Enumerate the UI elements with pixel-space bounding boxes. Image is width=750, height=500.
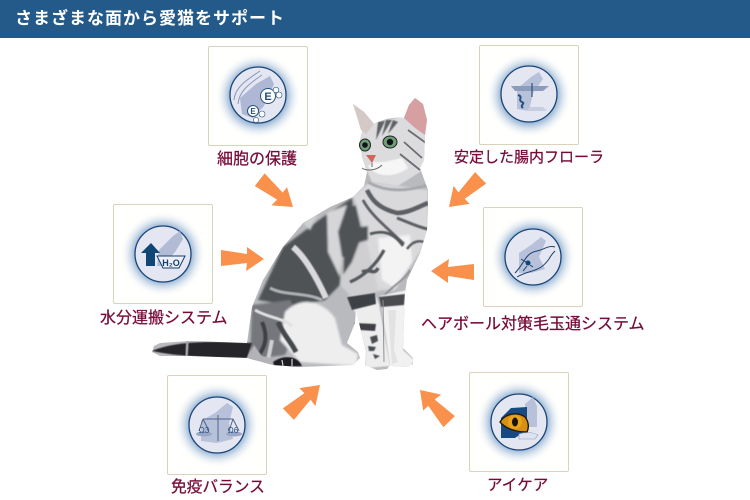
label: eye care: アイケア <box>487 477 548 494</box>
label: water transport: 水分運搬システム <box>100 310 228 327</box>
title bar: さまざまな面から愛猫をサポート <box>15 9 285 28</box>
light flank <box>327 205 347 277</box>
icon: water transport: H₂O <box>162 258 180 268</box>
label: immune balance: 免疫バランス <box>171 479 265 496</box>
panel: eye care <box>469 372 569 472</box>
arrow: water transport <box>221 247 264 271</box>
title bar <box>0 0 750 38</box>
arrow: eye care <box>411 382 459 429</box>
icon: balance scale: Ω6 <box>228 426 239 435</box>
label: hairball system: ヘアボール対策毛玉通システム <box>421 316 645 333</box>
tail <box>152 342 252 358</box>
front legs <box>347 294 390 368</box>
icon: cat with vitamin E <box>234 71 282 123</box>
icon: balance scale <box>196 403 242 443</box>
panel: stable gut flora <box>479 45 579 145</box>
icon: balance scale: Ω3 <box>199 426 210 435</box>
head <box>358 116 427 186</box>
neck stripes <box>367 190 428 213</box>
haunch <box>280 302 358 366</box>
label: cell protection: 細胞の保護 <box>217 151 297 168</box>
arrow: immune balance <box>281 376 328 424</box>
icon: cat eye <box>500 397 538 439</box>
arrow: stable gut flora <box>441 168 488 216</box>
icon: cat with vitamin E: E <box>250 107 256 116</box>
cat <box>152 98 428 370</box>
icon: cat with vitamin E: E <box>264 91 272 103</box>
back dark <box>258 198 356 306</box>
arrow: hairball system <box>431 259 474 283</box>
panel: water transport <box>113 204 213 304</box>
panel: cat illustration with arrows <box>152 98 486 428</box>
icon: hairball <box>515 237 555 277</box>
shoulder <box>338 240 379 296</box>
arrow: cell protection <box>252 171 300 216</box>
rear black paw <box>273 357 302 368</box>
icon: gut balance <box>511 72 549 111</box>
panel: cell protection <box>208 46 308 146</box>
panel: hairball system <box>483 207 583 307</box>
panel: immune balance <box>167 375 267 475</box>
label: stable gut flora: 安定した腸内フローラ <box>454 149 604 166</box>
